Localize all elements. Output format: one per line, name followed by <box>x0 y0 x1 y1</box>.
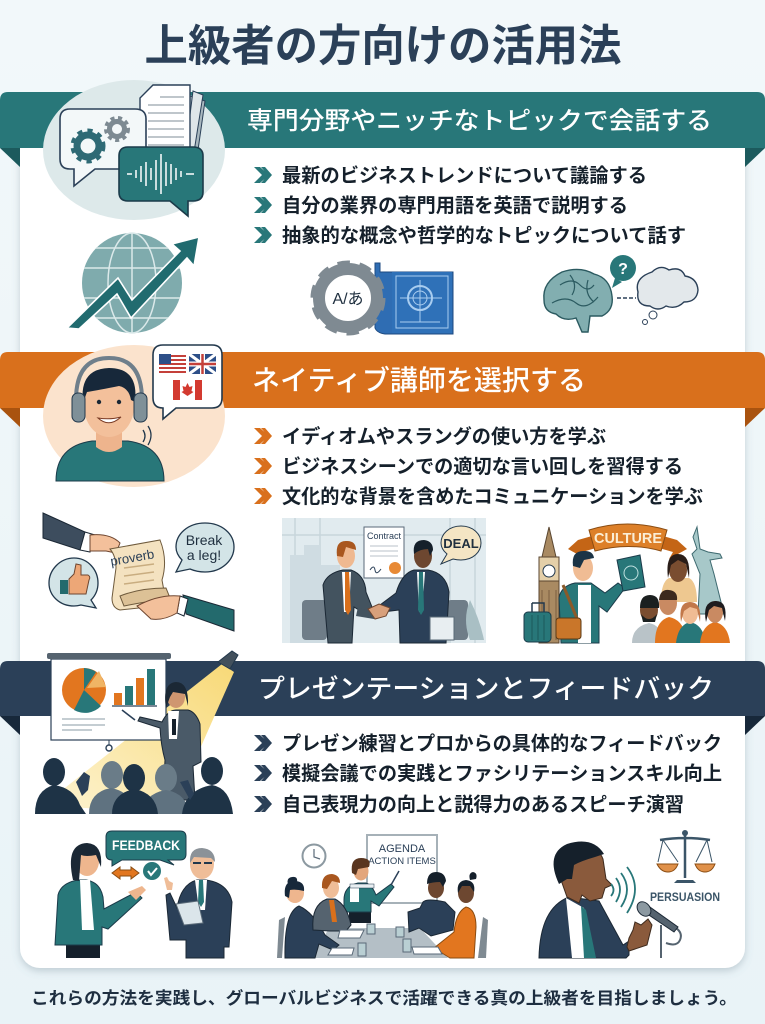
bubble: DEAL <box>441 526 481 564</box>
bullet text: プレゼン練習とプロからの具体的なフィードバック <box>282 732 722 755</box>
passport <box>617 555 645 591</box>
bullet marker <box>254 428 272 444</box>
bullet text: イディオムやスラングの使い方を学ぶ <box>282 425 606 448</box>
icon: check <box>143 862 161 880</box>
bullet list 1 <box>254 165 686 247</box>
illustration: business handshake <box>282 518 486 643</box>
illustration: persuasive speech <box>539 830 720 958</box>
bullet list 2 <box>254 425 703 508</box>
pie chart <box>62 668 106 713</box>
bullet marker <box>254 458 272 474</box>
footer message: これらの方法を実践し、グローバルビジネスで活躍できる真の上級者を目指しましょう。 <box>31 988 737 1008</box>
illustration: proverb scroll handed over: proverb <box>109 546 155 569</box>
band 1 <box>0 92 765 167</box>
bullet text: ビジネスシーンでの適切な言い回しを習得する <box>282 456 683 478</box>
people group <box>632 554 730 643</box>
bullet text: 模擬会議での実践とファシリテーションスキル向上 <box>282 763 722 785</box>
statue of liberty <box>692 527 724 614</box>
icon: gear and blueprint <box>314 263 453 334</box>
sound waves <box>611 867 635 913</box>
icon: smiling listener with headphones and flags <box>43 345 225 487</box>
presenter <box>122 682 201 800</box>
cups and papers <box>328 924 442 956</box>
presenter standing <box>344 858 399 923</box>
bullet text: 文化的な背景を含めたコミュニケーションを学ぶ <box>282 485 703 508</box>
bullet marker <box>254 796 272 812</box>
contract: Contract <box>367 531 402 541</box>
icon: gear and blueprint: A/あ <box>332 290 364 308</box>
icon: brain and thought cloud: ? <box>618 261 628 278</box>
contract <box>364 527 404 578</box>
bullet marker <box>254 765 272 781</box>
clock <box>302 844 326 868</box>
illustration: proverb scroll handed over <box>43 513 234 631</box>
suitcase <box>524 603 551 642</box>
flag: USA <box>159 354 186 374</box>
band 3 <box>0 661 765 735</box>
icon: brain and thought cloud <box>544 255 698 332</box>
bar chart <box>112 669 157 706</box>
bullet text: 最新のビジネストレンドについて議論する <box>282 165 647 187</box>
microphone <box>634 899 681 958</box>
bubble: Break a leg: Break <box>186 532 223 548</box>
spotlight beam <box>42 664 234 812</box>
balance scale <box>657 830 715 883</box>
title: 上級者の方向けの活用法 <box>144 23 622 71</box>
whiteboard: AGENDA <box>379 843 426 855</box>
bullet text: 自己表現力の向上と説得力のあるスピーチ演習 <box>282 793 684 816</box>
illustration: feedback conversation <box>55 831 232 958</box>
heading 1: 専門分野やニッチなトピックで会話する <box>247 107 712 135</box>
spot lamp <box>218 651 238 669</box>
bullet text: 抽象的な概念や哲学的なトピックについて話す <box>282 224 686 247</box>
bullet text: 自分の業界の専門用語を英語で説明する <box>282 195 628 217</box>
bubble: thumbs up <box>49 558 98 608</box>
illustration: presenter with audience <box>35 651 238 814</box>
icon: globe with rising arrow <box>67 233 199 333</box>
bubble: Break a leg: a leg! <box>187 547 221 563</box>
bullet marker <box>254 735 272 751</box>
person left <box>323 541 376 643</box>
speaker <box>539 842 652 958</box>
bubble: FEEDBACK <box>106 831 186 866</box>
person right <box>380 540 449 643</box>
traveller <box>556 551 625 643</box>
flag: UK <box>189 354 216 374</box>
icon: speech bubbles with gears and document <box>43 80 225 220</box>
man <box>164 848 232 958</box>
illustration: meeting with agenda <box>277 835 488 958</box>
audience silhouettes <box>35 757 233 814</box>
bullet marker <box>254 488 272 504</box>
banner: CULTURE <box>568 524 687 559</box>
woman <box>55 843 146 958</box>
arrow: two-way <box>112 867 139 879</box>
heading 3: プレゼンテーションとフィードバック <box>258 674 714 704</box>
bubble: Break a leg <box>176 523 234 572</box>
bubble: FEEDBACK: FEEDBACK <box>112 837 180 853</box>
whiteboard: ACTION ITEMS <box>368 856 436 867</box>
persuasion label: PERSUASION <box>650 890 720 904</box>
big ben <box>539 527 559 643</box>
table <box>312 928 448 958</box>
whiteboard <box>367 835 437 903</box>
flag: Canada <box>173 380 202 400</box>
heading 2: ネイティブ講師を選択する <box>252 365 586 396</box>
bullet list 3 <box>254 732 722 816</box>
main white panel <box>20 120 745 968</box>
bullet marker <box>254 167 272 183</box>
bullet marker <box>254 227 272 243</box>
projection board <box>47 653 171 751</box>
illustration: culture and travel <box>524 524 730 643</box>
banner: CULTURE: CULTURE <box>594 530 662 547</box>
section 2: native instructors <box>0 345 765 643</box>
band 2 <box>0 352 765 427</box>
section 3: presentation and feedback <box>0 651 765 958</box>
bubble: DEAL: DEAL <box>443 536 479 551</box>
seated attendees <box>277 872 488 958</box>
section 1: specialist topics <box>0 80 765 334</box>
bullet marker <box>254 197 272 213</box>
